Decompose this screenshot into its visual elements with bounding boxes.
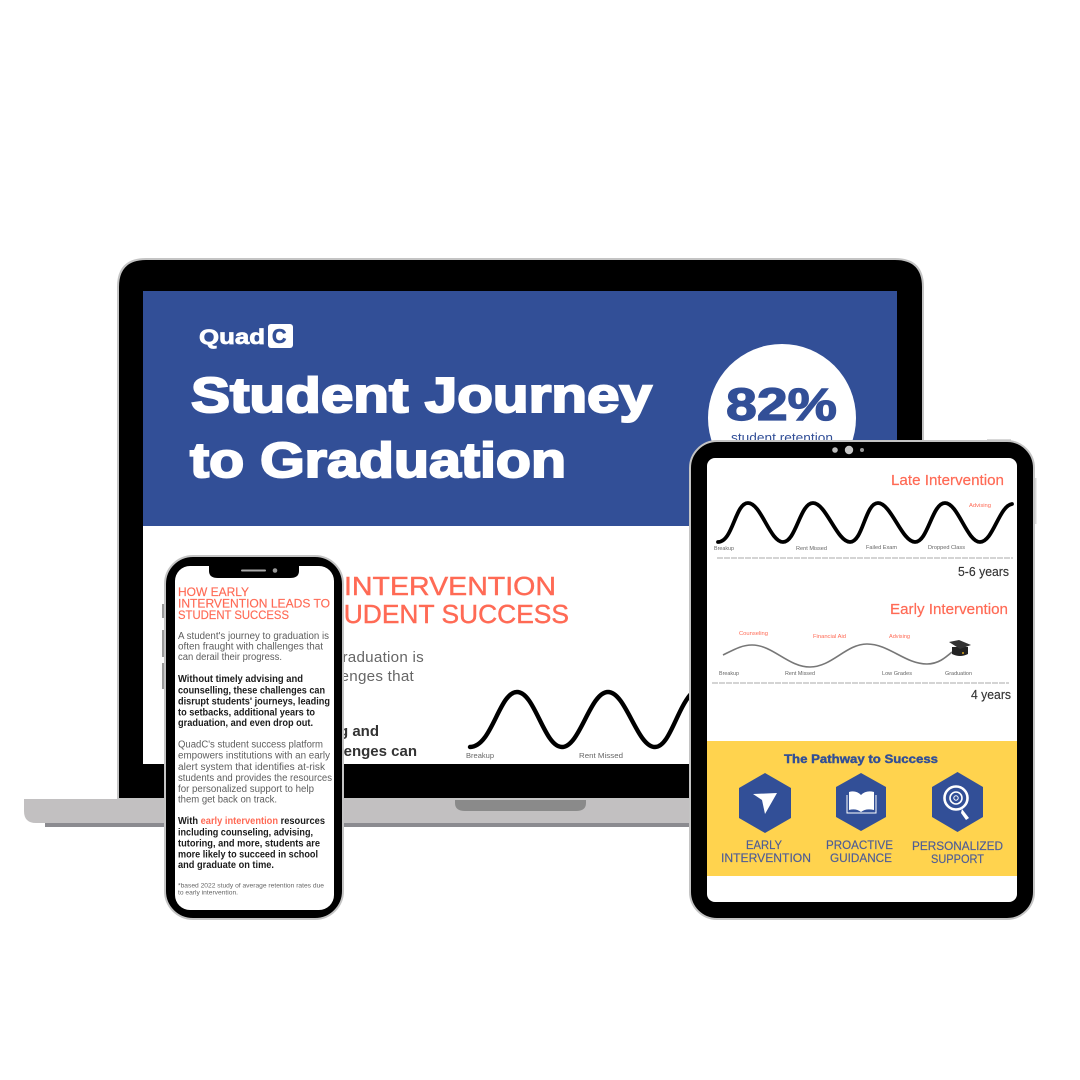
- phone paragraph 1: often fraught with challenges that: [178, 642, 323, 652]
- early intervention wave: Rent Missed: [785, 671, 815, 677]
- phone paragraph 2: disrupt students' journeys, leading: [178, 696, 330, 708]
- laptop body text: counselling, these challenges can: [174, 743, 417, 760]
- tablet buttons: [987, 439, 1036, 524]
- phone footnote: [178, 884, 325, 896]
- phone paragraph 1: A student's journey to graduation is: [178, 631, 329, 642]
- laptop wave chart: Breakup: [466, 751, 494, 760]
- section heading: STUDENT SUCCESS: [310, 601, 569, 629]
- late intervention wave: Advising: [969, 503, 991, 509]
- phone paragraph 2: [178, 674, 330, 729]
- phone paragraph 3: [178, 740, 332, 806]
- early intervention label: INTERVENTION: [721, 853, 811, 865]
- laptop bezel: [118, 259, 923, 799]
- phone paragraph 3: empowers institutions with an early: [178, 750, 330, 762]
- stat circle: 82% student retention: [708, 344, 856, 440]
- phone screen: [175, 566, 334, 910]
- late intervention wave: Failed Exam: [866, 545, 897, 551]
- laptop body text: [344, 651, 424, 759]
- stat circle: 82% student retention: 82%: [726, 379, 837, 430]
- laptop wave chart: [466, 692, 690, 760]
- phone paragraph 3: QuadC's student success platform: [178, 740, 323, 750]
- icon: personalized support hexagon: [932, 772, 983, 832]
- tablet screen: [707, 458, 1017, 902]
- early intervention wave: Low Grades: [882, 671, 912, 677]
- title: [190, 376, 654, 479]
- phone footnote: to early intervention.: [178, 890, 238, 896]
- laptop screen: [143, 291, 897, 780]
- phone paragraph 2: graduation, and even drop out.: [178, 718, 313, 729]
- phone paragraph 4: more likely to succeed in school: [178, 850, 318, 860]
- tablet camera: [832, 446, 864, 454]
- laptop body text: disrupt students' journeys, leading: [171, 763, 420, 780]
- laptop body text: timely advising and: [240, 723, 379, 740]
- late duration: 5-6 years: [958, 564, 1009, 579]
- early intervention heading: Early Intervention: [890, 602, 1008, 618]
- late intervention wave: Dropped Class: [928, 545, 965, 551]
- phone body: [165, 556, 343, 919]
- phone paragraph 2: counselling, these challenges can: [178, 686, 325, 696]
- early intervention wave: Graduation: [945, 671, 972, 677]
- phone paragraph 4: tutoring, and more, students are: [178, 838, 320, 850]
- tablet body: [690, 441, 1034, 919]
- phone paragraph 3: them get back on track.: [178, 794, 277, 806]
- phone side buttons: [162, 604, 165, 689]
- phone heading: INTERVENTION LEADS TO: [178, 596, 330, 610]
- phone paragraph 4: [178, 816, 325, 871]
- pathway heading: The Pathway to Success: [784, 754, 938, 766]
- panel: pathway to success: [707, 741, 1017, 876]
- tablet: [690, 439, 1036, 919]
- phone paragraph 2: Without timely advising and: [178, 674, 303, 685]
- early intervention wave: Breakup: [719, 671, 739, 677]
- early intervention wave: [719, 631, 972, 677]
- early intervention wave: Financial Aid: [813, 634, 846, 640]
- early intervention wave: Counseling: [739, 631, 768, 637]
- phone paragraph 3: for personalized support to help: [178, 784, 314, 795]
- icon: graduation cap: [949, 640, 971, 656]
- late intervention wave: Rent Missed: [796, 546, 827, 552]
- early intervention wave: Advising: [889, 634, 910, 640]
- late intervention heading: Late Intervention: [891, 473, 1004, 489]
- laptop base: [24, 799, 1016, 827]
- logo: C: [272, 326, 286, 348]
- phone paragraph 3: students and provides the resources: [178, 773, 332, 784]
- proactive guidance label: GUIDANCE: [830, 853, 892, 865]
- title: Student Journey: [191, 369, 652, 423]
- icon: proactive guidance hexagon: [836, 773, 886, 831]
- personalized support label: SUPPORT: [931, 854, 984, 866]
- stat circle: 82% student retention: student retention: [731, 430, 833, 445]
- personalized support label: PERSONALIZED: [912, 841, 1003, 853]
- phone paragraph 4: and graduate on time.: [178, 860, 274, 871]
- phone paragraph 3: alert system that identifies at-risk: [178, 762, 326, 773]
- phone footnote: *based 2022 study of average retention rates due: [178, 884, 325, 890]
- phone paragraph 1: can derail their progress.: [178, 652, 282, 663]
- proactive guidance label: [826, 840, 893, 865]
- logo: [199, 324, 293, 349]
- proactive guidance label: PROACTIVE: [826, 840, 893, 852]
- phone paragraph 2: to setbacks, additional years to: [178, 708, 315, 718]
- laptop wave chart: Rent Missed: [579, 751, 623, 760]
- late intervention wave: Breakup: [714, 546, 734, 552]
- phone paragraph 4: With early intervention resources: [178, 816, 325, 827]
- personalized support label: [912, 841, 1003, 866]
- logo: Quad: [199, 326, 265, 349]
- phone heading: STUDENT SUCCESS: [178, 608, 289, 622]
- phone heading: HOW EARLY: [178, 585, 249, 599]
- title: to Graduation: [190, 434, 566, 488]
- early intervention label: EARLY: [746, 840, 782, 852]
- phone: [162, 556, 343, 919]
- phone heading: [178, 585, 330, 622]
- phone paragraph 1: [178, 631, 329, 663]
- section heading: [346, 576, 568, 624]
- icon: early intervention hexagon: [739, 773, 791, 833]
- section heading: INTERVENTION: [344, 573, 556, 601]
- header band: [143, 291, 897, 526]
- phone paragraph 4: including counseling, advising,: [178, 828, 313, 838]
- phone notch: [209, 566, 299, 578]
- laptop: [24, 259, 1016, 827]
- late intervention wave: [714, 503, 1012, 552]
- early intervention label: [721, 840, 811, 865]
- laptop body text: often fraught with challenges that: [183, 668, 415, 685]
- early duration: 4 years: [971, 687, 1011, 702]
- laptop body text: A student's journey to graduation is: [179, 649, 424, 666]
